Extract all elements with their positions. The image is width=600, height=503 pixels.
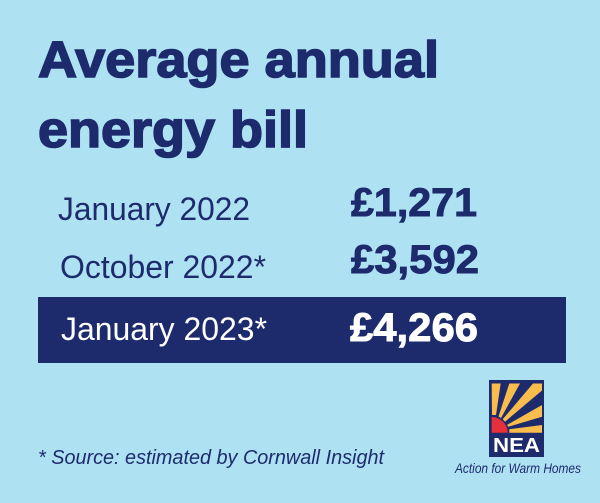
row: January 2022: £1,271 xyxy=(351,181,477,225)
icon: NEA logo: NEA xyxy=(493,435,540,457)
row: January 2023 highlighted: January 2023* xyxy=(61,311,267,347)
source note: * Source: estimated by Cornwall Insight xyxy=(38,446,385,469)
title: Average annual xyxy=(38,31,439,88)
row: January 2022: January 2022 xyxy=(58,191,250,227)
row: January 2022 xyxy=(58,181,477,227)
row: January 2023 highlighted xyxy=(38,297,566,363)
row: October 2022: October 2022* xyxy=(60,249,266,285)
row: October 2022 xyxy=(60,238,479,285)
icon: NEA logo xyxy=(489,380,544,457)
row: October 2022: £3,592 xyxy=(351,238,479,282)
title xyxy=(38,31,439,158)
row: January 2023 highlighted: £4,266 xyxy=(350,306,478,350)
logo tagline: Action for Warm Homes xyxy=(454,460,581,476)
title: energy bill xyxy=(38,101,308,158)
